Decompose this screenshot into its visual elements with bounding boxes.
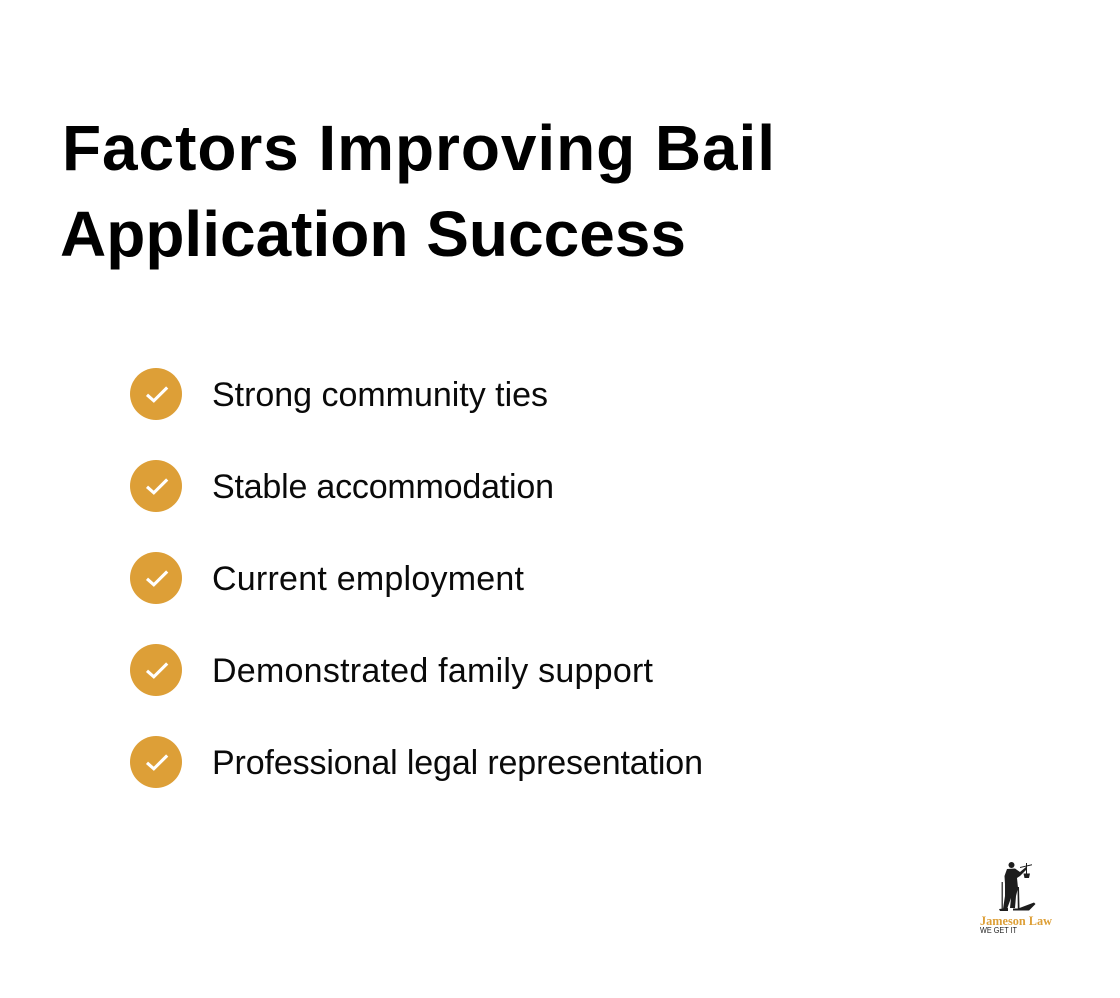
checklist — [130, 368, 703, 788]
item: demonstrated family support — [130, 644, 654, 696]
title: Application Success — [60, 198, 686, 270]
title — [60, 112, 775, 270]
item: professional legal representation: Professional legal representation — [212, 744, 703, 782]
title: Factors Improving Bail — [62, 112, 775, 184]
item: current employment — [130, 552, 525, 604]
logo: Jameson Law — [980, 862, 1052, 935]
item: stable accommodation: Stable accommodation — [212, 468, 554, 506]
logo tagline: WE GET IT — [980, 926, 1017, 935]
item: stable accommodation — [130, 460, 554, 512]
icon: lady justice — [999, 862, 1036, 911]
item: current employment: Current employment — [212, 560, 525, 598]
item: strong community ties: Strong community ties — [212, 376, 548, 414]
item: strong community ties — [130, 368, 548, 420]
item: professional legal representation — [130, 736, 703, 788]
logo wordmark: Jameson Law — [980, 914, 1052, 928]
item: demonstrated family support: Demonstrated family support — [212, 652, 654, 690]
